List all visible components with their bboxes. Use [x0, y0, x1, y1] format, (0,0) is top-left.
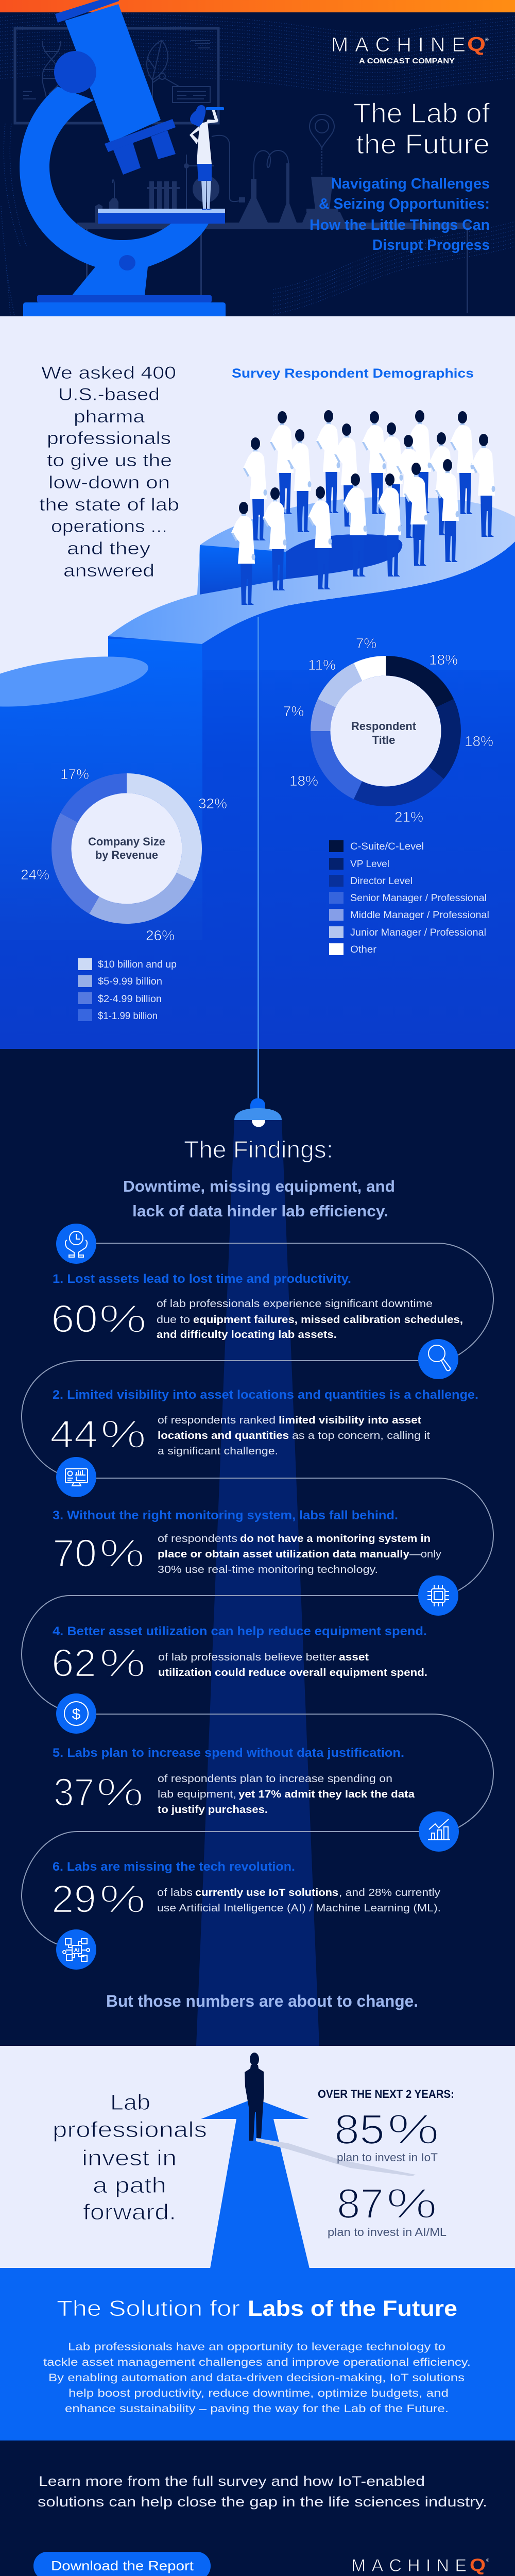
donut chart: company size	[21, 766, 227, 943]
finding 1: %	[99, 1297, 147, 1341]
body text: solution: enhance sustainability – paving the way for the Lab of the Future.	[65, 2403, 449, 2415]
donut chart: respondent title: Respondent	[351, 720, 417, 733]
left intro text: We asked 400	[41, 363, 176, 383]
finding 4: 62	[52, 1641, 96, 1685]
orange top bar	[0, 0, 515, 12]
panel: the findings	[0, 1049, 515, 2046]
finding 6: %	[99, 1877, 146, 1921]
subheading	[123, 1177, 395, 1220]
legend: company size	[78, 958, 177, 1022]
body text: solution: tackle asset management challenges and improve operational efficiency.	[43, 2357, 471, 2368]
left intro text: professionals	[47, 429, 171, 448]
finding 5: 37	[54, 1771, 94, 1815]
finding 1: 1. Lost assets lead to lost time and productivity.	[53, 1272, 351, 1286]
left intro text: U.S.-based	[58, 385, 160, 404]
logo: MachineQ footer: Q	[470, 2555, 486, 2575]
arrow	[201, 2098, 310, 2268]
finding 4: %	[99, 1641, 146, 1685]
icon: monitor dashboard	[56, 1457, 96, 1497]
legend: respondent title: Junior Manager / Professional	[350, 927, 486, 938]
finding 3: 70	[53, 1532, 97, 1575]
finding 4	[52, 1624, 427, 1685]
donut chart: respondent title: 18%	[465, 733, 493, 749]
finding 1: of lab professionals experience significant downtime	[157, 1298, 433, 1310]
icon: AI network: AI	[74, 1947, 79, 1954]
subtitle: & Seizing Opportunities:	[319, 196, 490, 212]
finding 2: locations and quantities	[158, 1430, 289, 1442]
donut chart: company size: 24%	[21, 867, 49, 883]
left intro text: and they	[67, 539, 150, 558]
donut chart: respondent title: 11%	[308, 657, 336, 673]
finding 1: and difficulty locating lab assets.	[157, 1329, 337, 1341]
text: path forward: professionals	[53, 2117, 207, 2142]
finding 2: limited visibility into asset	[279, 1415, 421, 1426]
stats: next 2 years: 85	[334, 2106, 385, 2153]
legend: respondent title: Director Level	[350, 876, 413, 887]
donut chart: respondent title: 18%	[289, 773, 318, 789]
subtitle: Navigating Challenges	[331, 176, 490, 192]
finding 2: 44	[50, 1413, 98, 1456]
body text: solution: By enabling automation and data-driven decision-making, IoT solutions	[48, 2372, 465, 2384]
decorative dotted waves	[0, 13, 515, 316]
finding 1: 60	[51, 1297, 98, 1341]
person silhouette	[245, 2053, 264, 2141]
heading: solution	[57, 2296, 457, 2321]
legend: company size: $5-9.99 billion	[98, 976, 162, 987]
icon: magnifier	[418, 1339, 458, 1379]
lab background window illustration	[15, 28, 218, 124]
donut chart: company size: Company Size	[88, 835, 165, 848]
logo: MachineQ: Q	[467, 33, 486, 56]
crowd of scientists	[231, 410, 495, 605]
stats: next 2 years: plan to invest in AI/ML	[328, 2226, 447, 2239]
text: path forward: Lab	[110, 2090, 150, 2115]
stats: next 2 years: %	[386, 2180, 437, 2227]
finding 3: do not have a monitoring system in	[240, 1533, 431, 1545]
heading: the findings: The Findings:	[184, 1136, 333, 1163]
text: path forward: invest in	[82, 2146, 177, 2171]
finding 4: 4. Better asset utilization can help reduce equipment spend.	[53, 1624, 427, 1638]
finding 5: %	[96, 1771, 144, 1815]
call to action text	[38, 2473, 487, 2510]
left intro text: operations ...	[51, 517, 167, 536]
finding 3: %	[99, 1532, 145, 1575]
heading: solution: The Solution for	[57, 2296, 240, 2321]
legend: respondent title: Other	[350, 944, 377, 955]
panel: survey demographics	[0, 316, 515, 1099]
finding 5: of respondents plan to increase spending on	[158, 1773, 392, 1785]
panel: path forward	[0, 2046, 515, 2268]
left intro text: answered	[63, 561, 154, 581]
finding 4: of lab professionals believe better	[158, 1652, 336, 1663]
finding 2	[50, 1388, 478, 1457]
donut chart: company size: 17%	[60, 766, 89, 782]
finding 5: to justify purchases.	[158, 1804, 268, 1816]
lamp	[234, 1098, 282, 1127]
blue background	[0, 541, 515, 1049]
connecting path	[22, 1243, 493, 1944]
finding 6: use Artificial Intelligence (AI) / Machine Learning (ML).	[157, 1903, 441, 1914]
lamp cord	[258, 617, 259, 1099]
lamp cord lower part	[258, 1049, 259, 1099]
finding 5: lab equipment,	[158, 1789, 236, 1800]
body text: solution: Lab professionals have an opportunity to leverage technology to	[68, 2341, 445, 2353]
logo: MachineQ: A COMCAST COMPANY	[359, 57, 455, 65]
finding 1	[51, 1272, 463, 1341]
legend: respondent title	[329, 840, 489, 955]
body text: solution	[43, 2341, 471, 2415]
finding 3: place or obtain asset utilization data manually	[158, 1549, 410, 1560]
finding 2: %	[100, 1413, 146, 1456]
light beam	[196, 1120, 319, 2046]
left intro text: to give us the	[47, 451, 172, 470]
finding 2: 2. Limited visibility into asset locations and quantities is a challenge.	[53, 1388, 478, 1402]
finding 5: 5. Labs plan to increase spend without data justification.	[53, 1746, 404, 1760]
heading: solution: Labs of the Future	[248, 2296, 457, 2321]
donut chart: respondent title: Title	[372, 734, 395, 747]
panel: footer	[0, 2441, 515, 2576]
subheading: lack of data hinder lab efficiency.	[132, 1202, 388, 1220]
button: download the report	[33, 2552, 211, 2576]
finding 6: , and 28% currently	[339, 1887, 440, 1899]
finding 5: yet 17% admit they lack the data	[238, 1789, 415, 1800]
stats: next 2 years: OVER THE NEXT 2 YEARS:	[318, 2088, 454, 2100]
donut chart: respondent title: 7%	[356, 635, 376, 651]
finding 3: 30% use real-time monitoring technology.	[158, 1564, 378, 1575]
logo: MachineQ	[331, 33, 489, 65]
finding 3	[53, 1509, 441, 1575]
button: download the report: Download the Report	[51, 2558, 194, 2573]
finding 4: utilization could reduce overall equipment spend.	[158, 1667, 427, 1679]
finding 6: 6. Labs are missing the tech revolution.	[53, 1860, 295, 1874]
subtitle	[310, 176, 490, 253]
finding 2: a significant challenge.	[158, 1446, 278, 1457]
donut chart: respondent title	[283, 635, 493, 825]
icon: AI network	[56, 1929, 96, 1970]
finding 4: asset	[339, 1652, 369, 1663]
subheading: Downtime, missing equipment, and	[123, 1177, 395, 1195]
finding 6: of labs	[157, 1887, 193, 1899]
call to action text: Learn more from the full survey and how IoT-enabled	[39, 2473, 425, 2489]
donut chart: company size: 32%	[198, 795, 227, 811]
icon: dollar coin: $	[72, 1706, 81, 1723]
icon: dollar coin	[56, 1693, 96, 1734]
stats: next 2 years	[318, 2088, 454, 2239]
finding 6	[52, 1860, 441, 1921]
icon: clock in hands	[56, 1224, 96, 1264]
scientist with telescope	[190, 105, 224, 210]
left intro text: pharma	[74, 407, 145, 427]
stats: next 2 years: %	[387, 2106, 439, 2153]
donut chart: respondent title: 7%	[283, 703, 304, 719]
logo: MachineQ: ®	[485, 37, 489, 42]
donut chart: company size: by Revenue	[95, 849, 158, 861]
donut chart: respondent title: 21%	[394, 809, 423, 825]
icon: rising chart	[419, 1811, 459, 1852]
call to action text: solutions can help close the gap in the life sciences industry.	[38, 2494, 487, 2510]
finding 6: 29	[52, 1877, 96, 1921]
legend: respondent title: Senior Manager / Professional	[350, 893, 487, 904]
heading: survey demographics: Survey Respondent Demographics	[232, 366, 474, 381]
winding platform	[0, 497, 515, 717]
closing statement: But those numbers are about to change.	[106, 1992, 418, 2010]
legend: company size: $10 billion and up	[98, 959, 177, 970]
subtitle: How the Little Things Can	[310, 217, 490, 233]
microscope	[20, 0, 226, 316]
legend: respondent title: C-Suite/C-Level	[350, 841, 424, 852]
title	[353, 98, 490, 160]
donut chart: respondent title: 18%	[429, 652, 458, 668]
text: path forward: forward.	[83, 2200, 176, 2225]
left intro text: the state of lab	[39, 495, 179, 515]
legend: company size: $1-1.99 billion	[98, 1011, 158, 1022]
logo: MachineQ: MACHINE	[331, 33, 466, 56]
stats: next 2 years: 87	[337, 2180, 384, 2227]
left intro text	[39, 363, 179, 581]
finding 3: 3. Without the right monitoring system, labs fall behind.	[53, 1509, 398, 1522]
legend: respondent title: Middle Manager / Professional	[350, 910, 489, 921]
legend: company size: $2-4.99 billion	[98, 994, 162, 1005]
title: the Future	[356, 129, 490, 160]
title: The Lab of	[353, 98, 490, 129]
panel: hero	[0, 0, 515, 316]
finding 3: of respondents	[158, 1533, 237, 1545]
panel: the solution	[0, 2268, 515, 2441]
text: path forward	[53, 2090, 207, 2225]
body text: solution: help boost productivity, reduce downtime, optimize budgets, and	[68, 2387, 449, 2399]
logo: MachineQ footer: MACHINE	[351, 2556, 467, 2575]
logo: MachineQ footer: ®	[486, 2558, 489, 2563]
text: path forward: a path	[93, 2173, 166, 2198]
lab bench and equipment	[77, 114, 470, 313]
donut chart: company size: 26%	[146, 927, 175, 943]
left intro text: low-down on	[48, 473, 170, 493]
finding 3: —only	[409, 1549, 441, 1560]
person shadow	[256, 2138, 416, 2176]
finding 2: of respondents ranked	[158, 1415, 276, 1426]
legend: respondent title: VP Level	[350, 859, 389, 870]
subtitle: Disrupt Progress	[372, 237, 490, 253]
finding 1: due to	[157, 1314, 190, 1326]
finding 2: as a top concern, calling it	[292, 1430, 431, 1442]
stats: next 2 years: plan to invest in IoT	[337, 2151, 438, 2164]
icon: microchip	[418, 1575, 458, 1616]
finding 1: equipment failures, missed calibration schedules,	[193, 1314, 463, 1326]
finding 5	[53, 1746, 415, 1816]
finding 6: currently use IoT solutions	[195, 1887, 338, 1899]
